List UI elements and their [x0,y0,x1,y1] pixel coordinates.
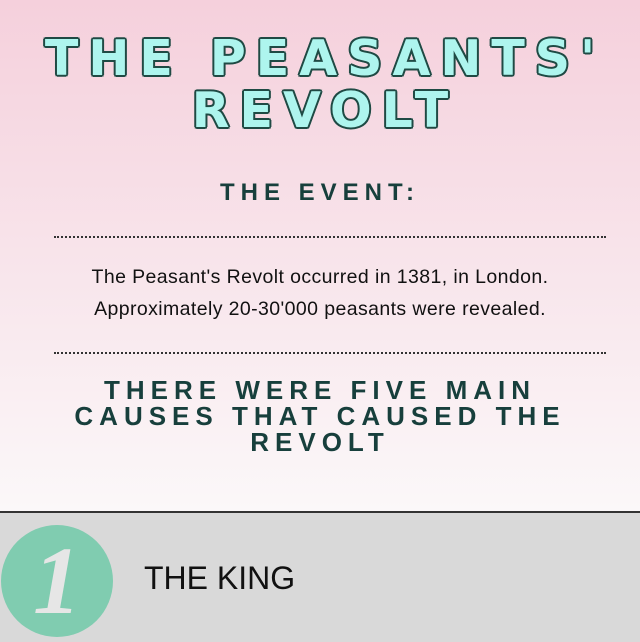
text block: event description [92,266,548,320]
heading: five causes: THERE WERE FIVE MAIN [104,375,536,405]
title: REVOLT [192,82,458,139]
icon: number 1 circle: 1 [33,527,81,634]
heading: five causes: REVOLT [250,427,390,457]
text block: event description: The Peasant's Revolt occurred in 1381, in London. [92,266,548,288]
heading: five causes [74,375,566,457]
text: the king: THE KING [144,560,295,596]
heading: the event: THE EVENT: [220,179,420,206]
heading: five causes: CAUSES THAT CAUSED THE [74,401,566,431]
title [43,30,605,139]
text block: event description: Approximately 20-30'000 peasants were revealed. [94,298,546,320]
panel: cause 1 [0,511,640,642]
background [0,0,640,512]
title: THE PEASANTS' [45,30,605,87]
icon: number 1 circle [1,525,113,637]
